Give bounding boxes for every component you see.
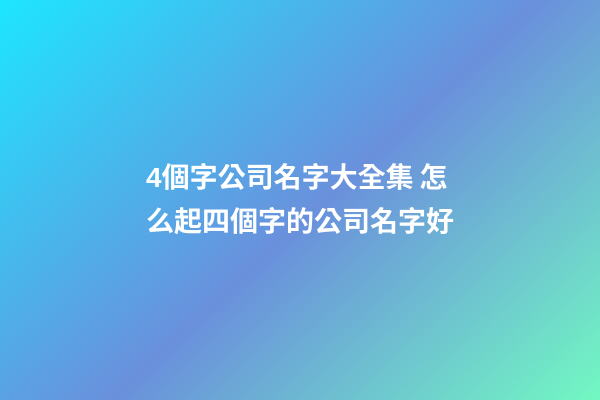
title: [146, 162, 454, 237]
title line 2: 么起四個字的公司名字好: [146, 206, 454, 237]
title line 1: 4個字公司名字大全集 怎: [146, 162, 447, 193]
